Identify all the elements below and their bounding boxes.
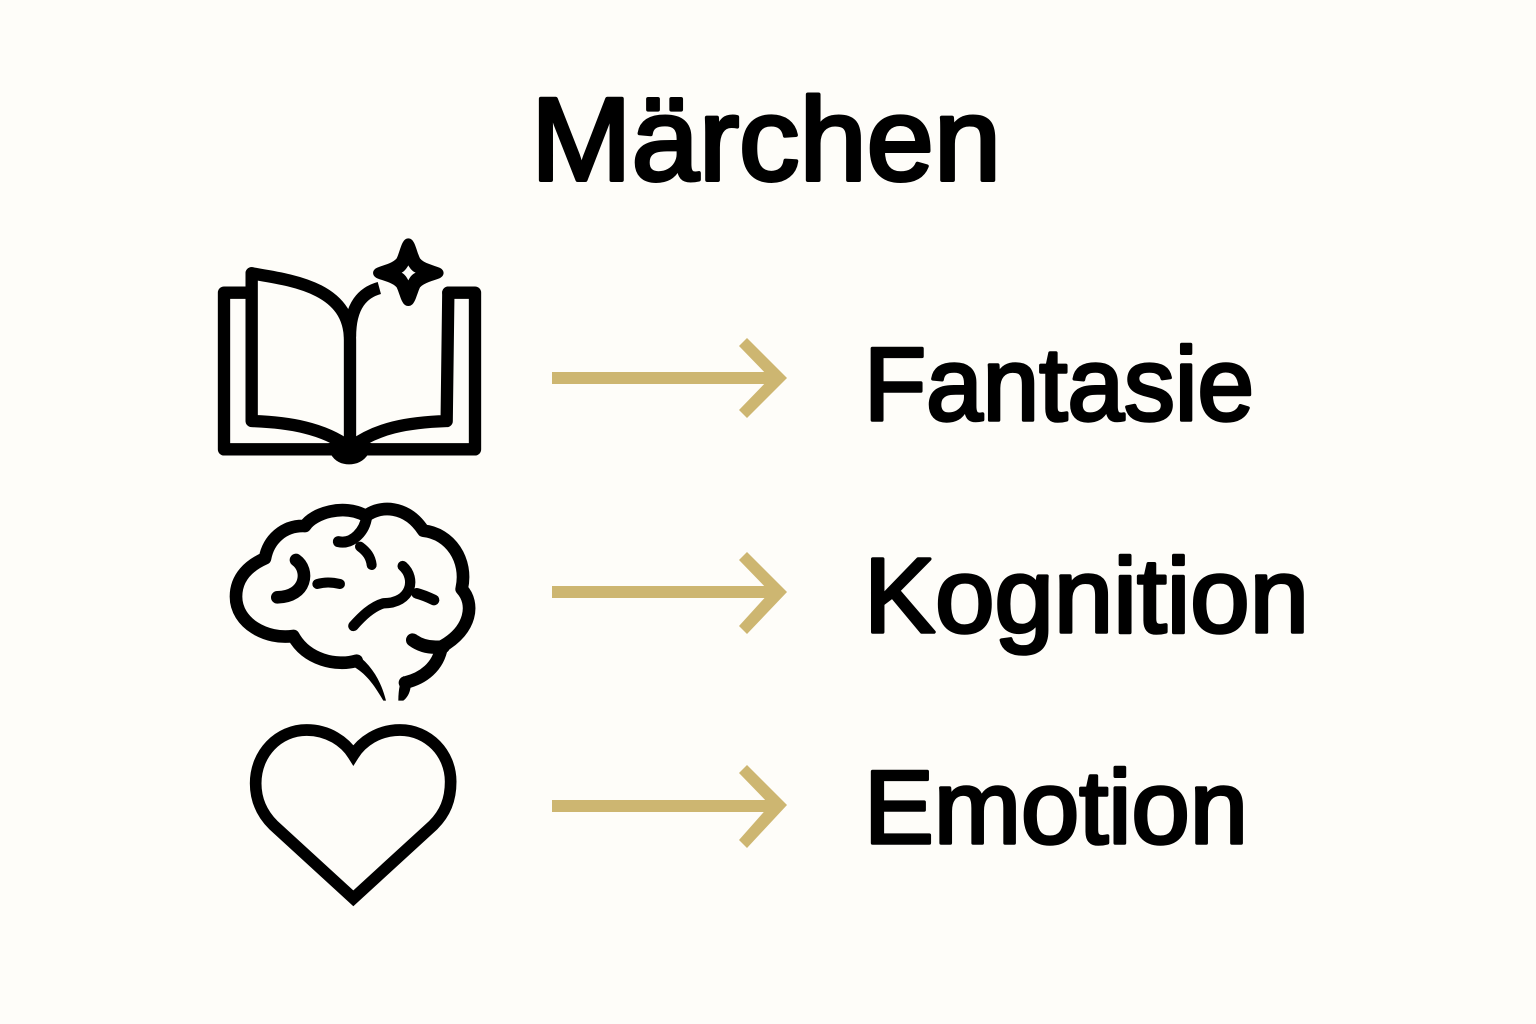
arrow: Fantasie	[552, 338, 787, 418]
icon: brain	[236, 509, 469, 701]
label: Fantasie: Fantasie	[864, 327, 1254, 443]
arrow: Emotion	[552, 765, 787, 848]
label: Kognition: Kognition	[864, 537, 1309, 655]
title: Märchen	[531, 74, 1001, 206]
label: Emotion: Emotion	[864, 750, 1248, 866]
icon: heart	[256, 730, 451, 898]
icon: open book with star	[224, 238, 475, 464]
icon: sparkle star	[373, 238, 444, 306]
arrow: Kognition	[552, 552, 787, 634]
